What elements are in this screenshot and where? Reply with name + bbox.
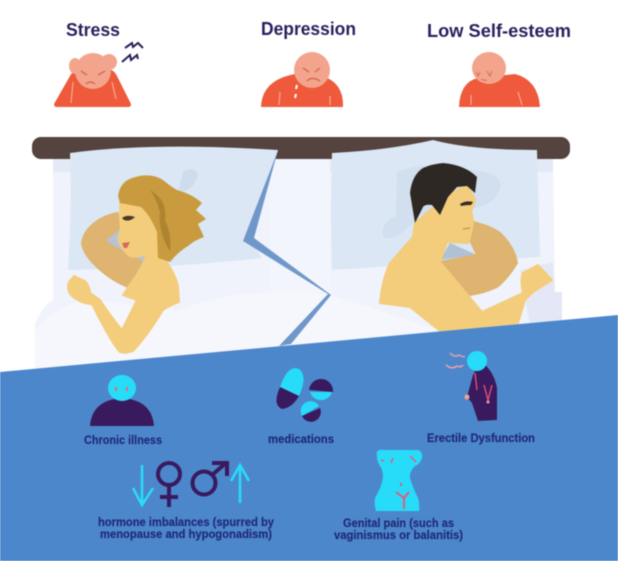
crack between partners xyxy=(243,150,331,346)
man xyxy=(380,163,552,331)
label: hormone imbalances xyxy=(98,517,275,541)
label: hormone imbalances: menopause and hypogonadism) xyxy=(100,529,272,541)
blue panel xyxy=(0,315,618,561)
icon: erectile dysfunction xyxy=(446,351,497,421)
headboard xyxy=(32,137,570,159)
left pillow xyxy=(68,147,278,270)
label: chronic illness: Chronic illness xyxy=(84,435,162,447)
label: genital pain: vaginismus or balanitis) xyxy=(334,530,463,542)
label: erectile dysfunction: Erectile Dysfunction xyxy=(427,433,535,445)
man arm behind head xyxy=(440,222,517,295)
icon: depressed person xyxy=(261,52,343,107)
heading: Depression: Depression xyxy=(261,19,356,39)
icon: torso with genital pain xyxy=(375,450,422,511)
woman body and arm xyxy=(68,248,179,353)
icon: hormones xyxy=(133,463,249,507)
icon: stressed person xyxy=(54,43,143,107)
label: genital pain: Genital pain (such as xyxy=(343,518,454,530)
icon: medications xyxy=(276,368,333,422)
woman hair xyxy=(118,175,206,262)
right pillow xyxy=(331,140,540,270)
heading: Low Self-esteem: Low Self-esteem xyxy=(427,21,571,41)
label: hormone imbalances: hormone imbalances (spurred by xyxy=(98,517,275,529)
bed xyxy=(35,159,562,372)
man body xyxy=(380,185,552,331)
heading: Stress: Stress xyxy=(66,20,120,40)
man hair xyxy=(410,163,477,223)
woman xyxy=(68,169,206,353)
label: genital pain xyxy=(334,518,463,542)
icon: low self-esteem person xyxy=(459,52,540,107)
icon: chronic illness xyxy=(90,375,154,426)
woman head xyxy=(118,203,158,258)
woman arm behind head xyxy=(82,213,142,287)
label: medications: medications xyxy=(268,434,334,446)
